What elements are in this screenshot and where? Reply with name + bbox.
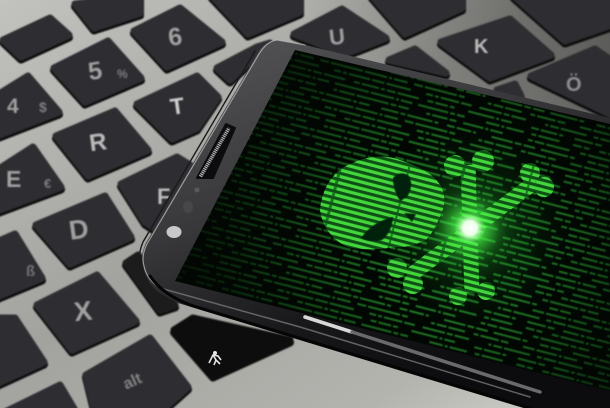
key legends: U <box>328 24 346 50</box>
key legends: 6 <box>166 22 184 52</box>
key legends: F <box>157 184 170 209</box>
front camera dots <box>183 188 200 213</box>
key legends: E <box>6 166 21 192</box>
matrix code lines <box>177 52 610 390</box>
key legends: alt <box>121 370 145 393</box>
phone edge highlights <box>139 40 540 408</box>
earpiece speaker <box>197 124 235 178</box>
key legends: R <box>88 128 109 157</box>
icon: running figure on function key <box>209 351 221 365</box>
key legends: Ö <box>566 73 582 96</box>
key legends: € <box>44 176 51 191</box>
key legends: K <box>474 36 489 58</box>
key legends: % <box>117 67 128 81</box>
bright light flare <box>446 204 494 252</box>
key legends: ß <box>26 263 35 280</box>
glow behind skull <box>396 151 547 306</box>
key legends: X <box>73 296 94 327</box>
key legends: 4 <box>7 95 19 118</box>
key legends: D <box>67 213 91 246</box>
phone screen <box>175 50 610 391</box>
skull and crossbones <box>320 150 554 305</box>
striped skull and bones <box>320 150 554 305</box>
home sensor dot <box>166 226 182 238</box>
phone body <box>142 40 610 408</box>
key legends: 5 <box>86 56 104 86</box>
skull eye sockets <box>361 173 416 241</box>
smartphone <box>139 40 610 408</box>
key legends: $ <box>39 99 47 115</box>
key legends: T <box>168 92 186 120</box>
